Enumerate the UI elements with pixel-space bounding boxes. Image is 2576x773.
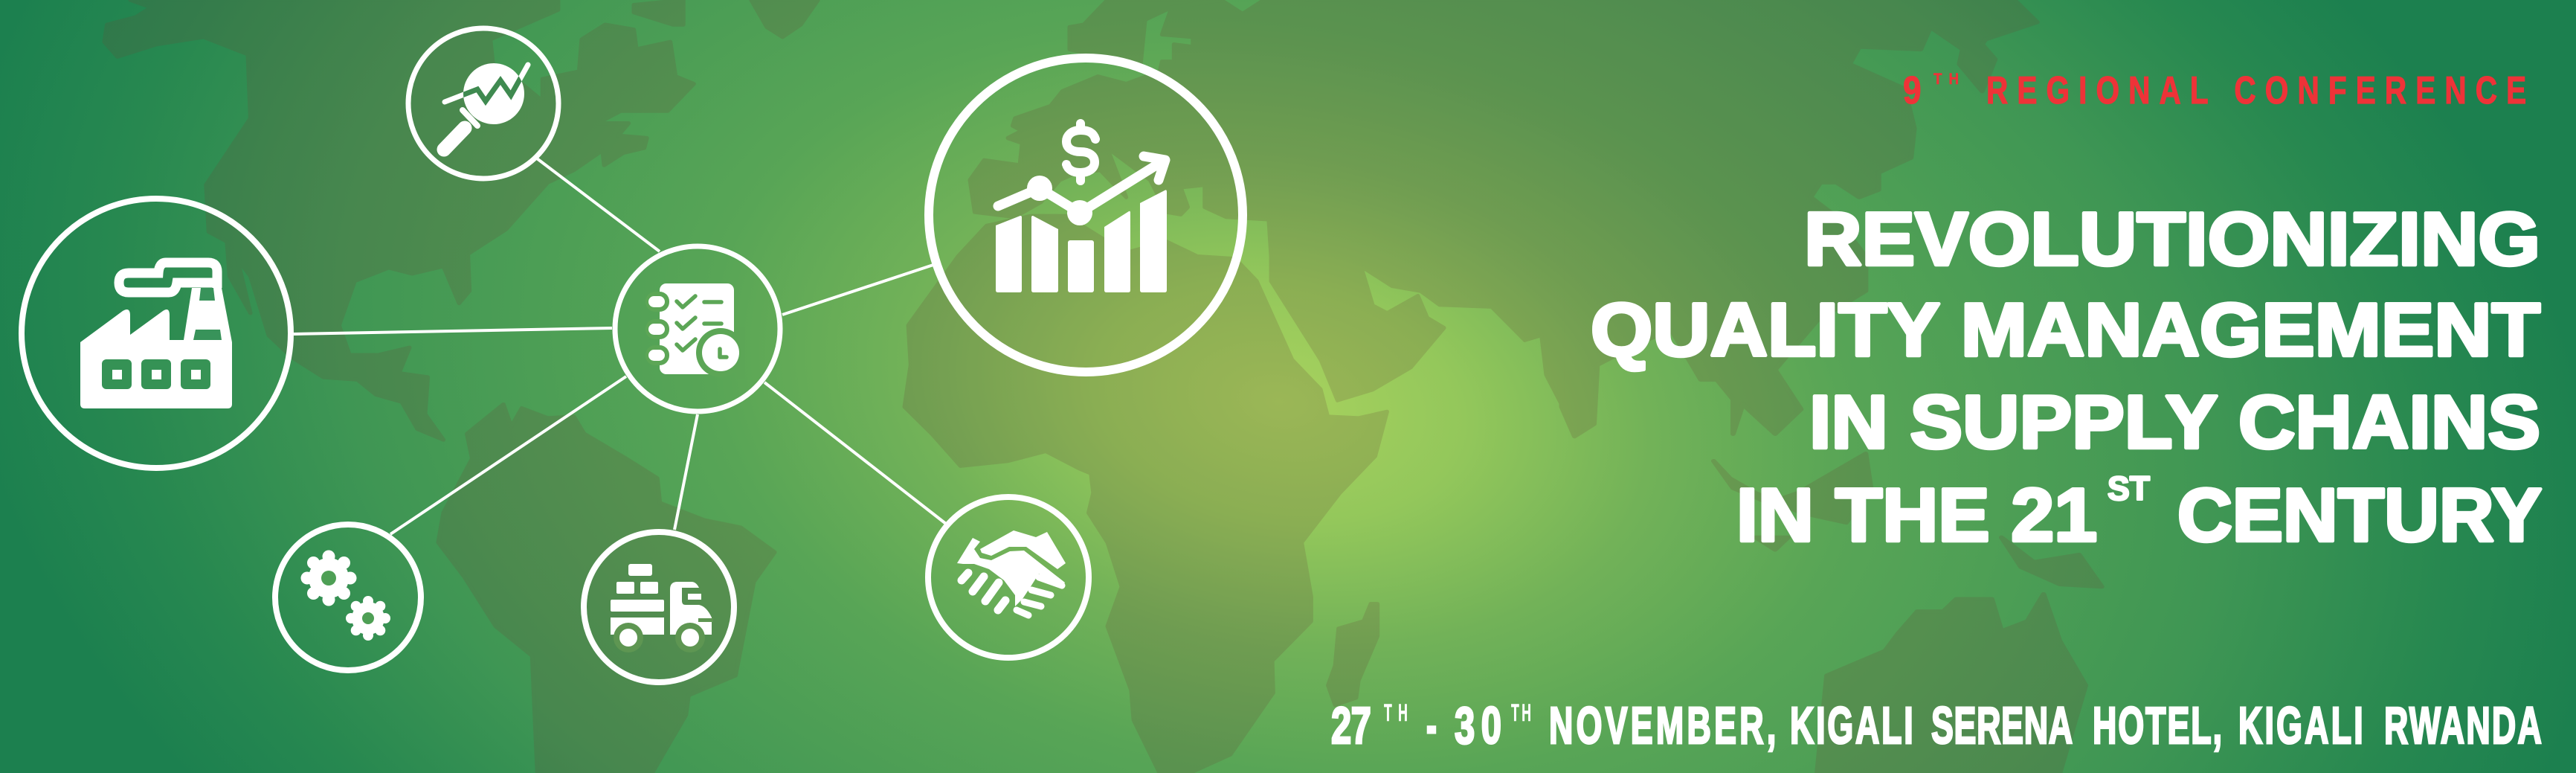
node: delivery truck xyxy=(584,532,734,682)
date and venue: 27 xyxy=(1331,696,1371,754)
title: IN SUPPLY CHAINS xyxy=(1809,381,2540,464)
date and venue: TH xyxy=(1384,701,1408,726)
date and venue: SERENA xyxy=(1931,697,2073,754)
map: Asia east xyxy=(1562,0,2037,436)
title: IN THE 21 xyxy=(1736,474,2097,557)
conference label: REGIONAL CONFERENCE xyxy=(1986,68,2526,112)
world map xyxy=(104,0,2102,773)
map: Greenland xyxy=(751,0,818,37)
map: Scandinavia xyxy=(1069,0,1221,66)
date and venue: KIGALI xyxy=(2238,697,2363,754)
icon: factory xyxy=(80,263,232,408)
map: New Guinea xyxy=(2001,537,2102,587)
conference label: 9 xyxy=(1903,69,1922,112)
map: North America xyxy=(104,0,694,440)
title xyxy=(1591,198,2542,557)
map: Java xyxy=(1756,537,1788,550)
date and venue: TH xyxy=(1511,701,1531,726)
map: South America xyxy=(438,404,775,773)
map: Australia xyxy=(1817,594,2086,773)
node: checklist hub xyxy=(615,246,780,411)
title: QUALITY MANAGEMENT xyxy=(1591,289,2540,372)
map: Madagascar xyxy=(1328,604,1378,705)
date and venue: NOVEMBER, xyxy=(1549,697,1776,754)
map: Africa xyxy=(904,216,1387,773)
date and venue: - xyxy=(1426,697,1437,755)
map: Sumatra and Borneo xyxy=(1713,454,1871,522)
date and venue: KIGALI xyxy=(1790,697,1913,754)
conference label: TH xyxy=(1933,71,1959,88)
node: factory xyxy=(22,199,291,468)
title: ST xyxy=(2108,469,2150,507)
title: CENTURY xyxy=(2177,474,2542,557)
map: Arctic island xyxy=(634,0,683,25)
connector lines xyxy=(294,158,946,534)
date and venue: 30 xyxy=(1455,696,1501,754)
icon: handshake xyxy=(957,530,1066,615)
date and venue: HOTEL, xyxy=(2093,697,2222,754)
date and venue: RWANDA xyxy=(2384,697,2542,754)
node: financial chart xyxy=(929,58,1243,372)
icon: checklist with clock xyxy=(645,283,745,379)
node: magnifying glass xyxy=(408,28,558,179)
icon: magnifier over trend line xyxy=(444,63,528,150)
map: Eurasia west xyxy=(970,0,1562,407)
node: gears xyxy=(275,525,421,670)
icon: truck with boxes xyxy=(611,564,713,652)
node: handshake xyxy=(928,497,1089,658)
icon: gears xyxy=(300,551,390,641)
icon: bar chart with rising arrow and dollar xyxy=(996,124,1167,292)
title: REVOLUTIONIZING xyxy=(1804,198,2540,281)
date and venue xyxy=(1331,696,2542,755)
